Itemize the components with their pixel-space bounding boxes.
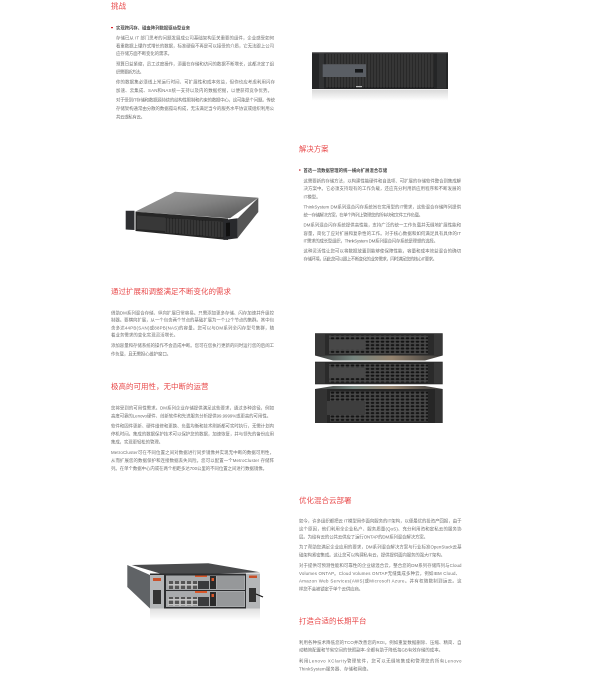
sub-heading: unified scale-out hybrid storage: 首选一流数据管理的统一横向扩展混合存储 [304, 167, 388, 174]
array 2 [315, 362, 443, 384]
text block: hybrid cloud body: 如今，许多组织都把云 IT模型用作面向服务的IT架构，以便最优的投资产回报，由于 [299, 517, 462, 524]
text block: availability body [111, 404, 275, 472]
text block: solution body: 这种灵活性让您可以将数据放置到能够使保障性能，容量和成本效益混合的确切 [304, 247, 462, 254]
text block: scale body: 含多达44PB(SAN)或88PB(NAS)的容量。您可以与DM系列全闪存型号集群，随 [111, 324, 275, 331]
text block: solution body: 这需要新的存储方法，以构建性能硬件和自选项、可扩展的存储软件整合到集成解 [304, 177, 462, 184]
text block: hybrid cloud body: 这个原因，他们利用全企业私户、服务质量(QoS)、充分利用资和定私云的服务协 [299, 526, 462, 533]
text block: challenges body: 加速、云集成、SAN和NAS统一支持以及内的数据挖掘，以便获得竞争优势。 [116, 87, 272, 94]
section: availability [111, 381, 275, 472]
section: challenges [111, 0, 276, 120]
section: scale and adapt [111, 286, 275, 358]
image: rack storage front view [312, 52, 448, 100]
heading: scale and adapt: 通过扩展和调整满足不断变化的需求 [111, 286, 231, 296]
image: three stacked storage arrays [315, 333, 443, 423]
heading: hybrid cloud: 优化混合云部署 [299, 495, 352, 505]
text block: availability body: 高度可靠的Lenovo硬件、创新软件和先进服务分析提供99.9999%或更高的可用性。 [111, 412, 271, 419]
array 1 [315, 333, 443, 360]
array 3 [315, 386, 443, 423]
text block: hybrid cloud body: 样您不会被锁定于单个云供应商。 [299, 586, 363, 593]
text block: solution body: IT模型。 [304, 193, 320, 200]
text block: challenges body: 存储已从 IT 部门思考的问题发展成公司基础架构至关重要的组件，企业感受如何 [116, 35, 275, 42]
text block: challenges body: 应存储方面不断变化的需求。 [116, 50, 172, 57]
text block: solution body: DM系列混合闪存系统提供高性能，支持广泛的统一工作负载并无缝地扩展性能和 [304, 222, 461, 229]
text block: availability body: 软件和固件更新、硬件维修和更换、负载均衡和技术刷新都可实时执行，无需计划内 [111, 422, 274, 429]
text block: challenges body: 你的数据集必须线上常运行时间、可扩展性和成本效益，但你也应考虑利用闪存 [116, 79, 276, 86]
text block: hybrid cloud body: Volumes ONTAP。Cloud Volumes ONTAP无缝集成多种云，例如IBM Cloud、 [299, 570, 460, 577]
text block: solution body: 决方案中。它必须支持现有的工作负载，还应充分利用新应用程序和不断发展的 [304, 185, 462, 192]
text block: challenges body: 存储架构通常由分散的数据孤岛构成，无法满足当今的服务水平协议或组织利用公 [116, 105, 275, 112]
text block: scale body: 借助DM系列混合存储、纵向扩展日常容易。只需添加更多存储、闪存加速并升级控 [111, 309, 275, 316]
text block: scale body [111, 309, 275, 358]
text block: platform body: 利用Lenovo XClarity管理软件，您可以无缝地集成和管理您的所有Lenovo [299, 658, 462, 665]
section: hybrid cloud [299, 495, 462, 593]
section: solution [299, 144, 462, 262]
text block: availability body: 您将受到的可用性需求。DM系列企业存储提供满足这些要求，通过多种途径，例如 [111, 404, 275, 411]
text block: availability body: MetroCluster可在不同位置之间对数据进行同步镜像并实现无中断的数据可用性， [111, 449, 274, 456]
text block: scale body: 作负载，且无需担心维护窗口。 [111, 351, 171, 358]
text block: scale body: 添加容量和存储系统的操作不会造成中断。您可在您执行更新的同时运行您的后阅工 [111, 342, 275, 349]
text block: solution body: ThinkSystem DM系列混合闪存系统旨在实用型的IT需求，这些混合存储阵列提供 [304, 203, 462, 210]
text block: hybrid cloud body: 为了帮助您满足企业应用的要求，DM系列混合解决方案与行业标准OpenStack云基 [299, 544, 462, 551]
heading: long-term platform: 打造合适的长期平台 [299, 615, 366, 625]
text block: solution body: IT需求的成长型组织，ThinkSystem DM系列混合闪存系统是理想的选择。 [304, 237, 438, 244]
text block: challenges body: 共云或私有云。 [116, 113, 145, 120]
text block: platform body: ThinkSystem服务器、存储和网络。 [299, 665, 371, 672]
heading: availability: 极高的可用性，无中断的运营 [111, 381, 209, 391]
text block: platform body [299, 639, 462, 672]
text block: platform body: 利用各种技术降低您的TCO并改善您的ROI。例如重复数据删除、压缩、精简、自 [299, 639, 462, 646]
text block: availability body: 从而扩展您的数据保护和连接数据丢失风险。您可以配置一个MetroCluster 存储阵 [111, 457, 275, 464]
text block: hybrid cloud body [299, 517, 462, 593]
bullet marker [299, 169, 301, 171]
text block: hybrid cloud body: Amazon Web Services(AWS)或Microsoft Azure。并有权随数制到运云。这 [299, 578, 462, 585]
text block: challenges body: 看重数据上爆炸式增长的数据，标准硬盘不再是可以接受的介质，它无法跟上公司 [116, 42, 274, 49]
text block: challenges body: 织需要新方法。 [116, 69, 144, 76]
text block: solution body [304, 177, 462, 262]
text block: availability body: 集成，实现更轻松的管理。 [111, 438, 163, 445]
text block: challenges body: 预算日益紧缩，员工过度操作，添置在存储和访问的数据不断增长，这都决定了组 [116, 60, 275, 67]
text block: availability body: 停机时间。集成的数据保护技术可以保护您的数据，加速恢复，并与领先的备份应用 [111, 430, 274, 437]
text block: hybrid cloud body: 础架构紧密集成。这让您可以构建私有云，提供提供面向服务的强大IT架构。 [299, 552, 445, 559]
heading: solution: 解决方案 [299, 144, 329, 154]
sub-heading: flash and disk: 实现跨闪存、磁盘阵列数据驱动型业务 [116, 24, 191, 31]
text block: solution body: 统一存储解决方案，在单个阵列上管理您的所有块和文件工作负载。 [304, 212, 423, 219]
text block: scale body: 着业务需求的变化实现灵活增长。 [111, 332, 178, 339]
heading: challenges: 挑战 [111, 0, 126, 10]
text block: availability body: 列。在单个数据中心内或在两个相距多达700公里的不同位置之间进行数据镜像。 [111, 465, 267, 472]
text block: challenges body: 对于受到IT存储和数据源持续的结构性限制和约束的数据中心，这可能是个问题。传统 [116, 97, 276, 104]
text block: hybrid cloud body: 对于提供可预测性能和可靠性的企业级混合云，整合您的DM系列存储阵列与Cloud [299, 562, 462, 569]
text block: hybrid cloud body: 层。为给有云的公共云供应了运行ONTAP的DM系列混合解决方案。 [299, 533, 428, 540]
text block: platform body: 动精简配置和节省空间的快照副本-全都有助于降低每GB有效存储的成本。 [299, 647, 443, 654]
text block: challenges body [116, 35, 276, 120]
image: storage controller rear view [127, 563, 263, 620]
text block: solution body: 存储环境，因此您可以跟上不断变化的业务需求，同时满足您的核心IT要求。 [304, 255, 437, 262]
image: 2U storage array angled view [126, 192, 258, 240]
section: long-term platform [299, 615, 462, 672]
text block: solution body: 容量，简化了应对扩展和复杂性的工作。对于核心数据和如何满足具有具体的IT [304, 230, 461, 237]
bullet marker [111, 27, 113, 28]
text block: scale body: 制器。要横向扩展，从一个包含两个节点的基础扩展为一个12个节点的集群。其中包 [111, 317, 275, 324]
